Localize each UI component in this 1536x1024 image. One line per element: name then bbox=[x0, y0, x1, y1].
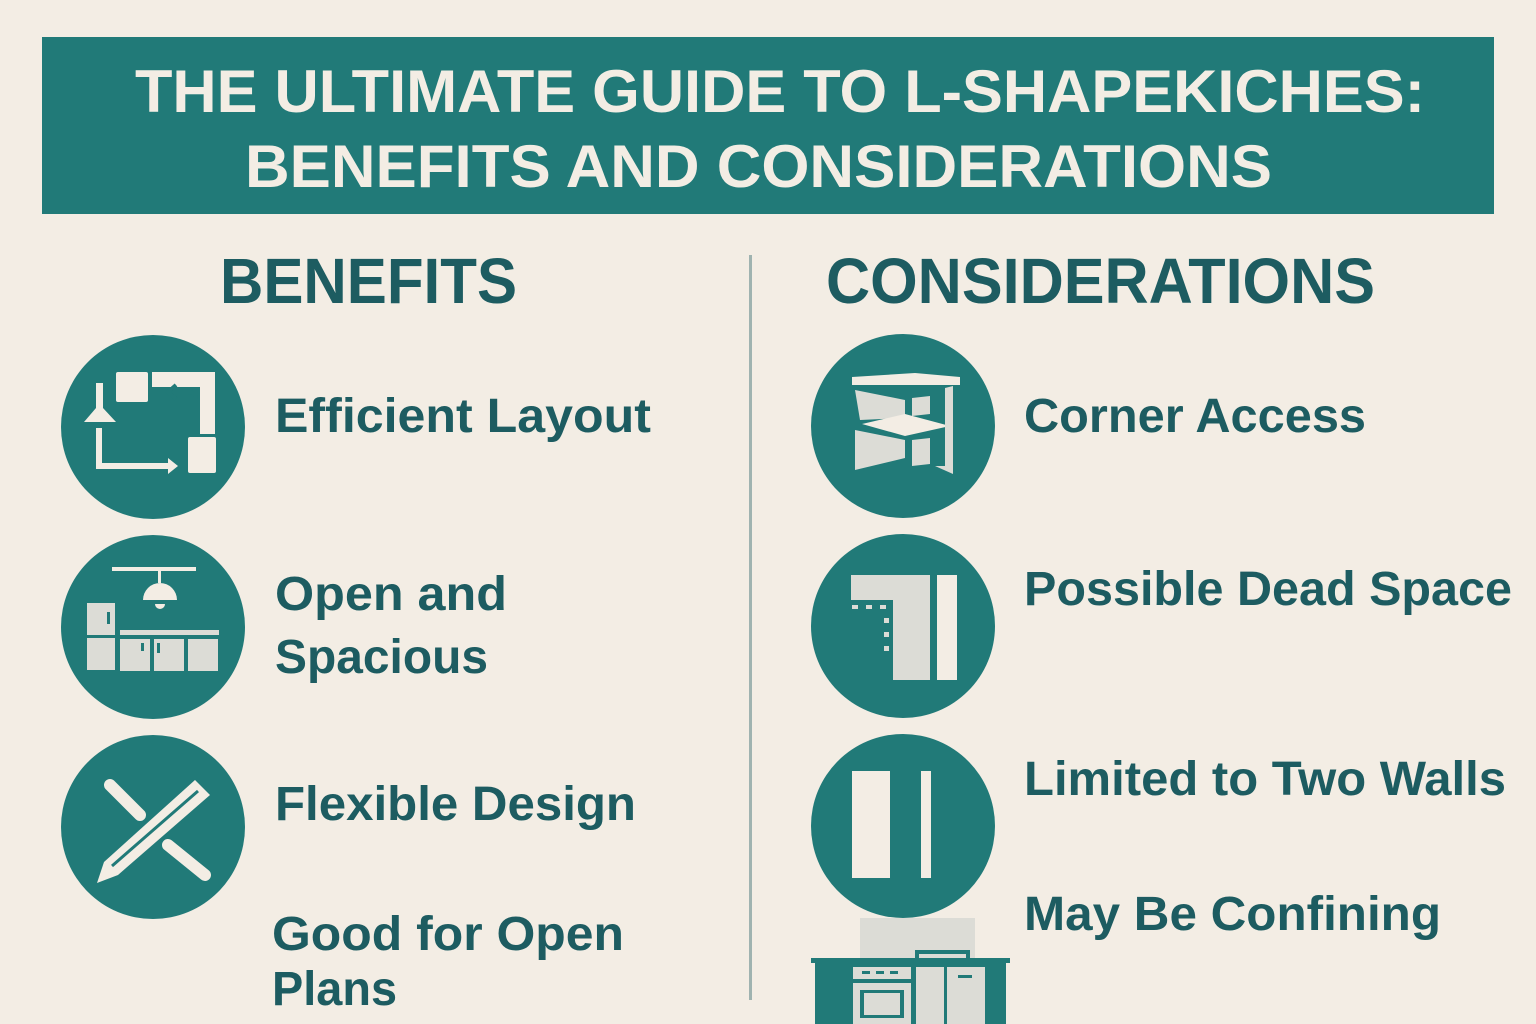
icon: open and spacious bbox=[61, 535, 245, 719]
title banner: BENEFITS AND CONSIDERATIONS bbox=[245, 133, 1272, 200]
title banner bbox=[42, 37, 1494, 214]
text: limited to two walls: Limited to Two Walls bbox=[1024, 753, 1506, 806]
text: corner access: Corner Access bbox=[1024, 390, 1366, 443]
icon: limited to two walls bbox=[811, 734, 995, 918]
text: good for open plans: Good for Open bbox=[272, 908, 624, 961]
text: open and spacious bbox=[275, 568, 507, 684]
text: flexible design: Flexible Design bbox=[275, 778, 636, 831]
icon: flexible design bbox=[61, 735, 245, 919]
text: good for open plans bbox=[272, 908, 624, 1016]
text: possible dead space: Possible Dead Space bbox=[1024, 563, 1512, 616]
text: open and spacious: Spacious bbox=[275, 631, 488, 684]
icon: possible dead space bbox=[811, 534, 995, 718]
text: good for open plans: Plans bbox=[272, 963, 397, 1016]
icon: kitchen counter bbox=[811, 918, 1010, 1024]
text: may be confining: May Be Confining bbox=[1024, 888, 1441, 941]
icon: corner access bbox=[811, 334, 995, 518]
icon: efficient layout bbox=[61, 335, 245, 519]
text: open and spacious: Open and bbox=[275, 568, 507, 621]
text: efficient layout: Efficient Layout bbox=[275, 390, 651, 443]
title banner: THE ULTIMATE GUIDE TO L-SHAPEKICHES: bbox=[135, 58, 1425, 125]
heading: benefits: BENEFITS bbox=[220, 245, 517, 317]
heading: considerations: CONSIDERATIONS bbox=[826, 245, 1375, 317]
